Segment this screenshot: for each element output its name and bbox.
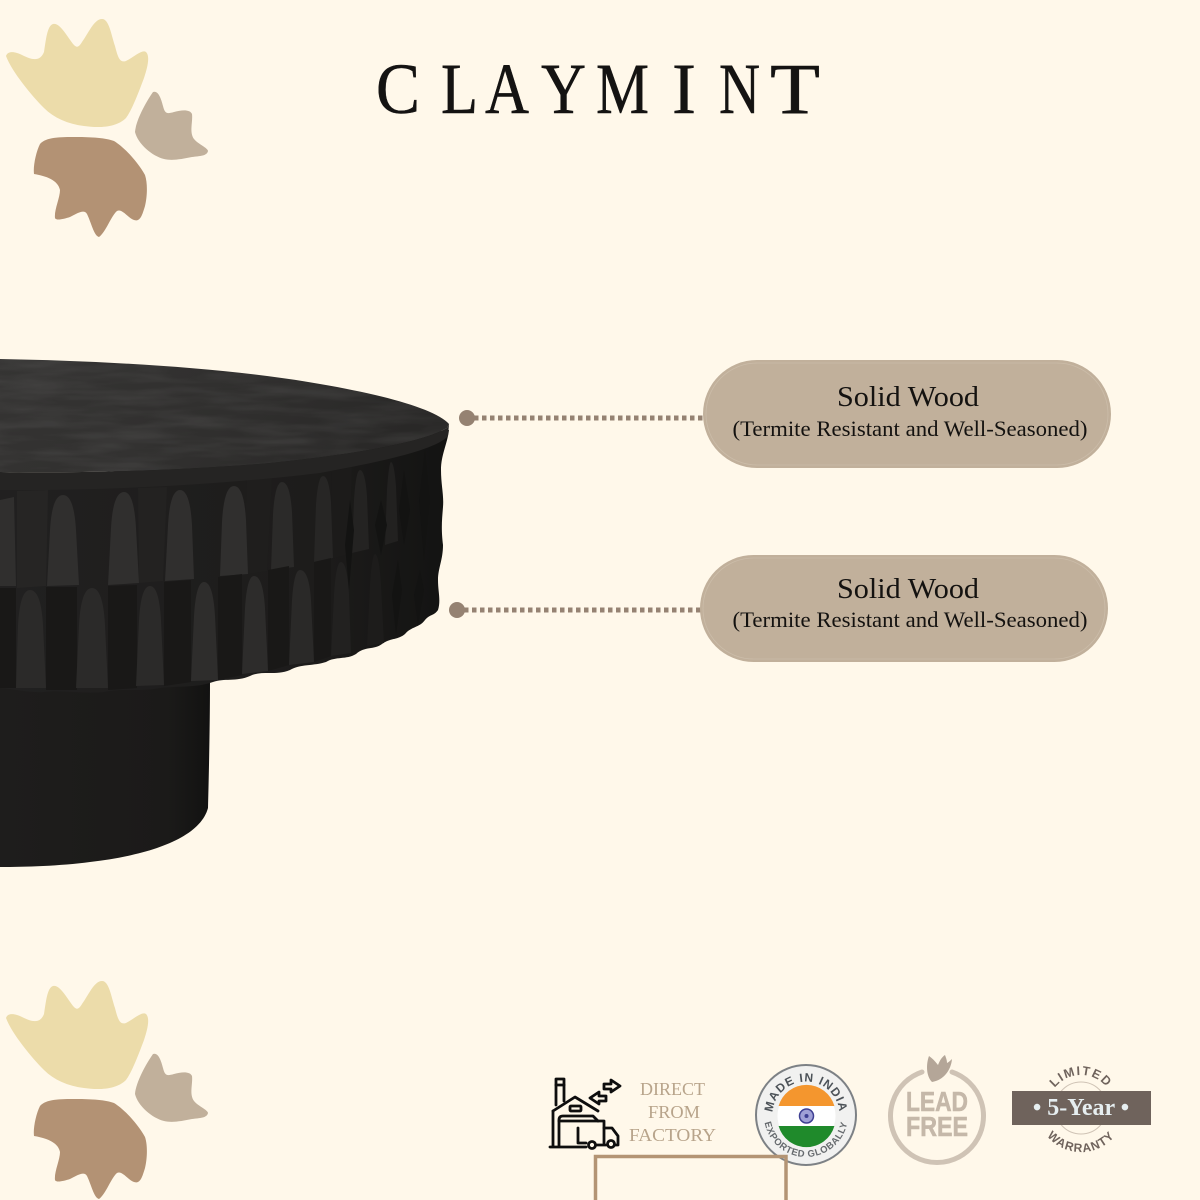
badge: made in india: MADE IN INDIA: [764, 1073, 847, 1112]
badge: limited 5-year warranty: [1012, 1066, 1151, 1152]
badge text: direct from factory: [629, 1079, 716, 1145]
callout 2: pill: (Termite Resistant and Well-Seasoned): [732, 607, 1088, 632]
badge text: direct from factory: FACTORY: [629, 1125, 716, 1145]
logo wordmark: [376, 49, 820, 129]
logo wordmark: A: [485, 49, 529, 129]
table top surface: [0, 359, 449, 472]
logo wordmark: C: [376, 49, 420, 129]
badge: made in india: [755, 1064, 857, 1166]
badge: limited 5-year warranty: WARRANTY: [1048, 1130, 1112, 1152]
callout 1: pill: (Termite Resistant and Well-Seasoned): [732, 416, 1088, 441]
badge: made in india: EXPORTED GLOBALLY: [764, 1121, 847, 1157]
decorative leaves: bottom left: [6, 981, 208, 1199]
logo wordmark: L: [441, 49, 478, 129]
carved drum body: [0, 430, 449, 693]
facets upper row light: [0, 462, 398, 586]
icon: factory and delivery truck: [550, 1079, 620, 1148]
logo wordmark: Y: [541, 49, 586, 129]
callout 1: pill: Solid Wood: [837, 381, 980, 413]
facets right edge shadows: [345, 450, 430, 635]
table base cylinder: [0, 680, 210, 867]
callout 1: pill: [703, 360, 1111, 468]
empty outlined box: [596, 1156, 786, 1200]
badge: lead free: [890, 1055, 984, 1163]
decorative leaves: top left: [6, 19, 208, 237]
logo wordmark: T: [770, 49, 820, 129]
callout 1: leader line: [459, 410, 704, 426]
badge: limited 5-year warranty: • 5-Year •: [1033, 1095, 1129, 1121]
product photo: carved round table: [0, 359, 449, 867]
badge: lead free: FREE: [906, 1111, 968, 1142]
facets upper row dark: [17, 467, 352, 588]
badge text: direct from factory: FROM: [648, 1102, 700, 1122]
callout 2: pill: [700, 555, 1108, 662]
badge text: direct from factory: DIRECT: [640, 1079, 705, 1099]
callout 2: pill: Solid Wood: [837, 573, 980, 605]
logo wordmark: M: [596, 49, 649, 129]
logo wordmark: N: [719, 49, 760, 129]
facets lower row light: [16, 554, 384, 688]
wood grain on top: [0, 359, 449, 472]
logo wordmark: I: [672, 49, 696, 129]
table rim: [0, 424, 449, 490]
facets lower row dark: [0, 558, 331, 690]
badge: lead free: LEAD: [906, 1086, 968, 1117]
callout 2: leader line: [449, 602, 701, 618]
badge: limited 5-year warranty: LIMITED: [1049, 1066, 1110, 1088]
